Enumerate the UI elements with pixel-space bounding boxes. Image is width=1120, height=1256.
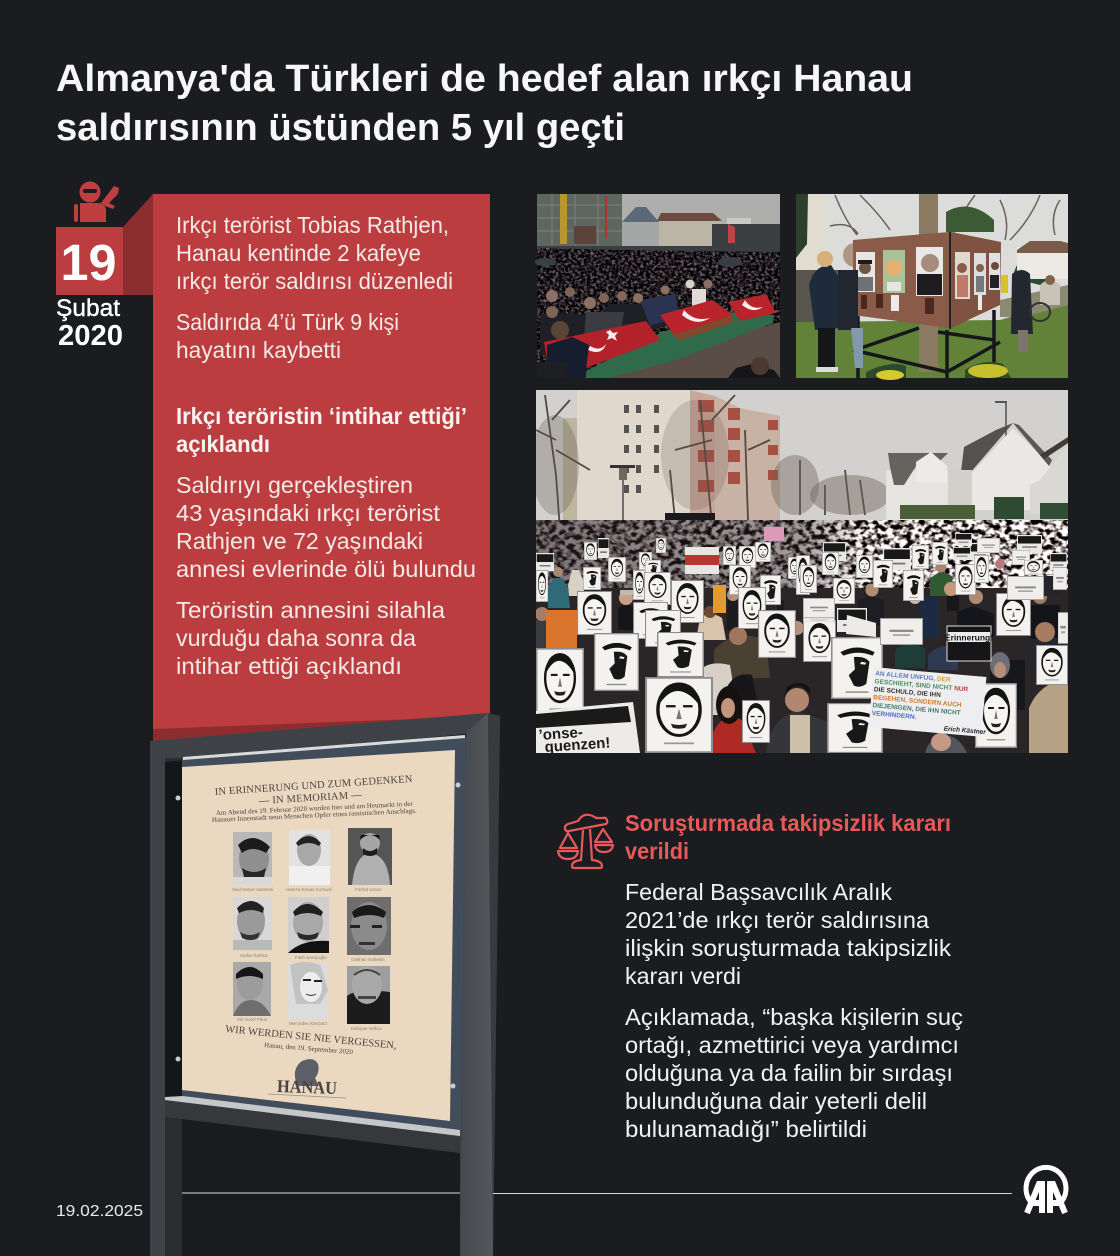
placard: Erich Kästner quote: DIEJENIGEN, DIE IHN NICHT bbox=[872, 702, 961, 717]
apartment block bbox=[563, 390, 780, 528]
placard: Erich Kästner quote bbox=[869, 667, 991, 737]
placard: Erich Kästner quote: DIE SCHULD, DIE IHN bbox=[874, 686, 941, 699]
heading: suicide statement bbox=[176, 403, 467, 457]
text block: attack summary: ırkçı terör saldırısı düzenledi bbox=[176, 268, 453, 294]
text block: perpetrator details: 43 yaşındaki ırkçı terörist bbox=[176, 500, 440, 526]
heading: investigation dropped bbox=[625, 810, 951, 864]
heading: suicide statement: Irkçı teröristin ‘intihar ettiği’ bbox=[176, 403, 467, 429]
placard: Erich Kästner quote: VERHINDERN. bbox=[871, 710, 917, 721]
people in foreground bbox=[685, 622, 1068, 753]
poster bbox=[182, 750, 455, 1121]
placard: Konsequenzen: ’onse- bbox=[538, 724, 583, 744]
text block: perpetrator details: Teröristin annesini silahla bbox=[176, 597, 446, 623]
title: saldırısının üstünden 5 yıl geçti bbox=[56, 107, 625, 149]
street lamps bbox=[622, 403, 1007, 520]
poster closing text: WIR WERDEN SIE NIE VERGESSEN, bbox=[225, 1024, 397, 1052]
text block: attack summary: Irkçı terörist Tobias Rathjen, bbox=[176, 212, 449, 238]
text block: investigation details: Federal Başsavcılık Aralık bbox=[625, 879, 892, 905]
text block: investigation details: 2021’de ırkçı terör saldırısına bbox=[625, 907, 930, 933]
memorial posters bbox=[856, 247, 1000, 314]
date: month: Şubat bbox=[56, 295, 120, 322]
text block: perpetrator details bbox=[176, 472, 476, 679]
text block: investigation details: ortağı, azmettirici veya yardımcı bbox=[625, 1032, 959, 1058]
Hanau logo: HANAU bbox=[277, 1076, 337, 1098]
coffin flags bbox=[544, 294, 776, 368]
poster closing text: Hanau, den 19. September 2020 bbox=[264, 1042, 354, 1056]
poster heading: Hanauer Innenstadt neun Menschen Opfer eines rassistischen Anschlags. bbox=[212, 808, 417, 824]
text block: perpetrator details: Rathjen ve 72 yaşındaki bbox=[176, 528, 423, 554]
background crowd bbox=[536, 520, 1068, 588]
victims photo row 3 bbox=[233, 962, 390, 1031]
photo: crowd with portrait placards bbox=[531, 390, 1068, 756]
placard: Erich Kästner quote: BEGEHEN, SONDERN AUCH bbox=[873, 694, 962, 709]
text block: perpetrator details: vurduğu daha sonra da bbox=[176, 625, 417, 651]
bare trees bbox=[536, 395, 865, 530]
Hanau logo bbox=[268, 1059, 346, 1098]
text block: investigation details: olduğuna ya da failin bir sırdaşı bbox=[625, 1060, 953, 1086]
text block: perpetrator details: intihar ettiği açıklandı bbox=[176, 653, 402, 679]
date: year: 2020 bbox=[58, 320, 123, 352]
icon: AA logo bbox=[1026, 1167, 1066, 1213]
text block: investigation details: kararı verdi bbox=[625, 963, 741, 989]
panel: red text panel bbox=[123, 194, 490, 745]
text block: attack summary bbox=[176, 212, 453, 363]
poster heading: — IN MEMORIAM — bbox=[258, 790, 362, 807]
mourners bbox=[540, 280, 712, 356]
houses bbox=[886, 423, 1068, 522]
date block bbox=[56, 227, 123, 352]
victims photo row 1 bbox=[232, 828, 392, 892]
text block: investigation details: bulunduğuna dair yeterli delil bbox=[625, 1088, 927, 1114]
placard: Erich Kästner quote: Erich Kästner bbox=[943, 725, 987, 736]
victims photo row 1: Hamza Kenan Kurtović bbox=[286, 887, 333, 892]
text block: perpetrator details: Saldırıyı gerçekleştiren bbox=[176, 472, 413, 498]
placard: Erich Kästner quote: AN ALLEM UNFUG, DER bbox=[875, 670, 951, 684]
text block: investigation details: Açıklamada, “başka kişilerin suç bbox=[625, 1004, 963, 1030]
poster heading bbox=[212, 774, 417, 824]
placard: Erinnerung bbox=[945, 626, 993, 661]
display board with memorial poster bbox=[150, 713, 500, 1256]
icon: scales of justice bbox=[558, 815, 613, 868]
victims photo row 3: Kaloyan Velkov bbox=[351, 1026, 383, 1031]
heading: investigation dropped: Soruşturmada takipsizlik kararı bbox=[625, 810, 951, 836]
date: day number: 19 bbox=[60, 234, 116, 291]
text block: investigation details: ilişkin soruşturmada takipsizlik bbox=[625, 935, 951, 961]
placard portraits bbox=[536, 533, 1068, 753]
footer date: 19.02.2025 bbox=[56, 1203, 143, 1220]
victims photo row 1: Said Nesar Hashemi bbox=[232, 887, 273, 892]
victims photo row 3: Vili Viorel Păun bbox=[237, 1017, 268, 1022]
victims photo row 1: Ferhat Unvar bbox=[355, 887, 382, 892]
text block: attack summary: Saldırıda 4’ü Türk 9 kişi bbox=[176, 309, 399, 335]
banner with portraits bbox=[685, 547, 719, 574]
text block: attack summary: hayatını kaybetti bbox=[176, 337, 341, 363]
victims photo row 2: Sedat Gürbüz bbox=[240, 953, 269, 958]
placard: Konsequenzen bbox=[536, 702, 640, 756]
victims photo row 3: Mercedes Kierpacz bbox=[289, 1021, 328, 1026]
placard: Erinnerung: Erinnerung! bbox=[945, 632, 993, 642]
standing woman bbox=[809, 251, 841, 372]
text block: investigation details bbox=[625, 879, 963, 1142]
heading: suicide statement: açıklandı bbox=[176, 431, 270, 457]
text block: investigation details: bulunamadığı” belirtildi bbox=[625, 1116, 867, 1142]
title bbox=[56, 58, 913, 149]
board frame bbox=[150, 713, 500, 1256]
photo: memorial board bbox=[796, 194, 1068, 380]
poster heading: Am Abend des 19. Februar 2020 wurden hier und am Heumarkt in der bbox=[216, 801, 414, 817]
footer rule bbox=[493, 1192, 1012, 1194]
victims photo row 2: Gökhan Gültekin bbox=[351, 957, 385, 962]
fold of panel bbox=[123, 194, 153, 295]
icon: masked attacker bbox=[74, 182, 119, 222]
photo: funeral with coffins bbox=[535, 194, 780, 378]
text block: perpetrator details: annesi evlerinde ölü bulundu bbox=[176, 556, 476, 582]
victims photo row 2: Fatih Saraçoğlu bbox=[295, 955, 327, 960]
victims photo row 2 bbox=[233, 897, 391, 962]
label placards bbox=[546, 527, 1044, 648]
placard: Konsequenzen: quenzen! bbox=[544, 734, 611, 756]
heading: investigation dropped: verildi bbox=[625, 838, 689, 864]
poster heading: IN ERINNERUNG UND ZUM GEDENKEN bbox=[214, 774, 413, 798]
placard: Erich Kästner quote: GESCHIEHT, SIND NICHT NUR bbox=[874, 678, 969, 693]
text block: attack summary: Hanau kentinde 2 kafeye bbox=[176, 240, 421, 266]
mid-distance people bbox=[535, 559, 1061, 650]
title: Almanya'da Türkleri de hedef alan ırkçı Hanau bbox=[56, 58, 913, 100]
